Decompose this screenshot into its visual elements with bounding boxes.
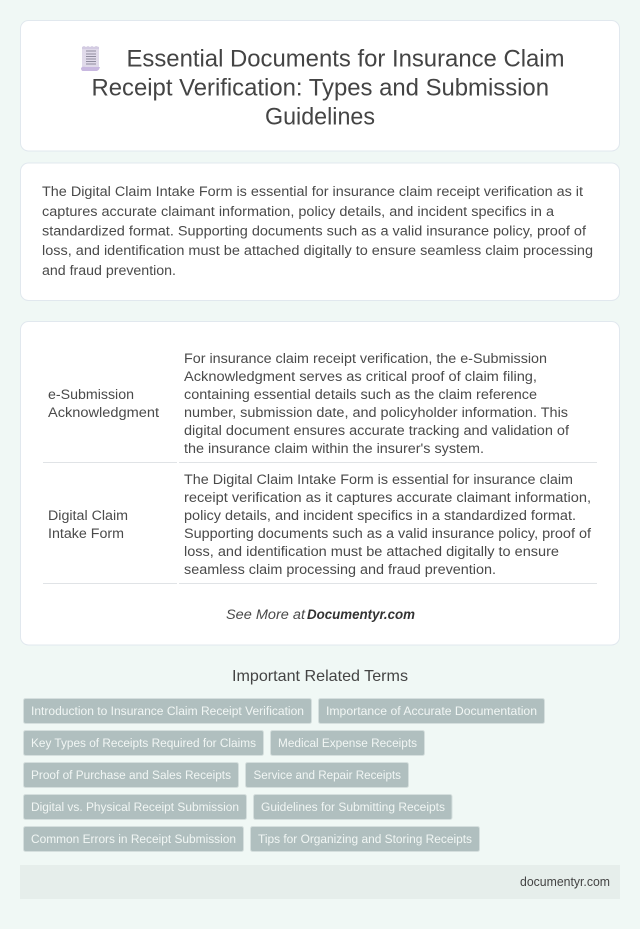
summary text [42, 184, 593, 279]
footer bar [20, 865, 620, 899]
table row: Digital Claim Intake Form: loss, and identification must be attached digitally to ensure [184, 544, 559, 560]
table row: e-Submission Acknowledgment [43, 351, 597, 463]
tag: Introduction to Insurance Claim Receipt Verification [31, 704, 304, 718]
footer bar: documentyr.com [520, 874, 610, 889]
panel: related term tags [24, 698, 544, 852]
heading: important related terms: Important Related Terms [232, 668, 408, 685]
table row: Digital Claim Intake Form [43, 472, 597, 584]
panel: title card [20, 20, 620, 151]
table row: Digital Claim Intake Form: seamless claim processing and fraud prevention. [184, 562, 496, 578]
tag: Digital vs. Physical Receipt Submission [31, 800, 239, 814]
tag [270, 730, 424, 756]
title: Essential Documents for Insurance Claim [126, 46, 564, 72]
tag: Importance of Accurate Documentation [326, 704, 537, 718]
tag [24, 762, 238, 788]
summary text: and fraud prevention. [42, 263, 176, 279]
tag [24, 794, 246, 820]
tag [246, 762, 408, 788]
see more link: Documentyr.com [307, 607, 415, 623]
tag [250, 826, 480, 852]
table row: e-Submission Acknowledgment: number, submission date, and policyholder information. This [184, 405, 568, 421]
title: Guidelines [265, 104, 375, 130]
table row: Digital Claim Intake Form: policy details, and incident specifics in a standardized format. [184, 508, 576, 524]
table row: e-Submission Acknowledgment: Acknowledgment serves as critical proof of claim filing, [184, 369, 537, 385]
panel: document table [20, 322, 620, 645]
table row: e-Submission Acknowledgment: digital document ensures accurate tracking and validation of [184, 423, 569, 439]
table row: e-Submission Acknowledgment: e-Submission [48, 387, 134, 403]
table row: e-Submission Acknowledgment: the insurance claim within the insurer's system. [184, 441, 484, 457]
tag [24, 730, 264, 756]
see more link [226, 607, 415, 623]
tag [24, 698, 312, 724]
summary text: loss, and identification must be attached digitally to ensure seamless claim processing [42, 243, 593, 259]
table row: e-Submission Acknowledgment: Acknowledgment [48, 405, 159, 421]
tag [254, 794, 452, 820]
tag: Guidelines for Submitting Receipts [261, 800, 445, 814]
table row: Digital Claim Intake Form: Intake Form [48, 526, 124, 542]
see more link: See More at [226, 607, 306, 623]
panel: summary paragraph [20, 163, 620, 300]
table row: Digital Claim Intake Form: The Digital Claim Intake Form is essential for insurance claim [184, 472, 573, 488]
summary text: standardized format. Supporting documents such as a valid insurance policy, proof of [42, 224, 586, 240]
tag [24, 826, 244, 852]
tag: Tips for Organizing and Storing Receipts [258, 832, 472, 846]
table row: Digital Claim Intake Form: receipt verification as it captures accurate claimant information, [184, 490, 591, 506]
title [92, 46, 564, 130]
tag: Service and Repair Receipts [254, 768, 401, 782]
table row: Digital Claim Intake Form: Supporting documents such as a valid insurance policy, proof of [184, 526, 591, 542]
table row: Digital Claim Intake Form: Digital Claim [48, 508, 128, 524]
summary text: The Digital Claim Intake Form is essential for insurance claim receipt verification as it [42, 184, 583, 200]
tag [318, 698, 544, 724]
table row: e-Submission Acknowledgment: containing essential details such as the claim reference [184, 387, 537, 403]
title: Receipt Verification: Types and Submission [92, 74, 549, 102]
icon: receipt [81, 46, 100, 71]
tag: Key Types of Receipts Required for Claims [31, 736, 256, 750]
summary text: captures accurate claimant information, policy details, and incident specifics in a [42, 204, 554, 220]
tag: Common Errors in Receipt Submission [31, 832, 236, 846]
table row: e-Submission Acknowledgment: For insurance claim receipt verification, the e-Submission [184, 351, 547, 367]
tag: Proof of Purchase and Sales Receipts [31, 768, 231, 782]
tag: Medical Expense Receipts [278, 736, 417, 750]
